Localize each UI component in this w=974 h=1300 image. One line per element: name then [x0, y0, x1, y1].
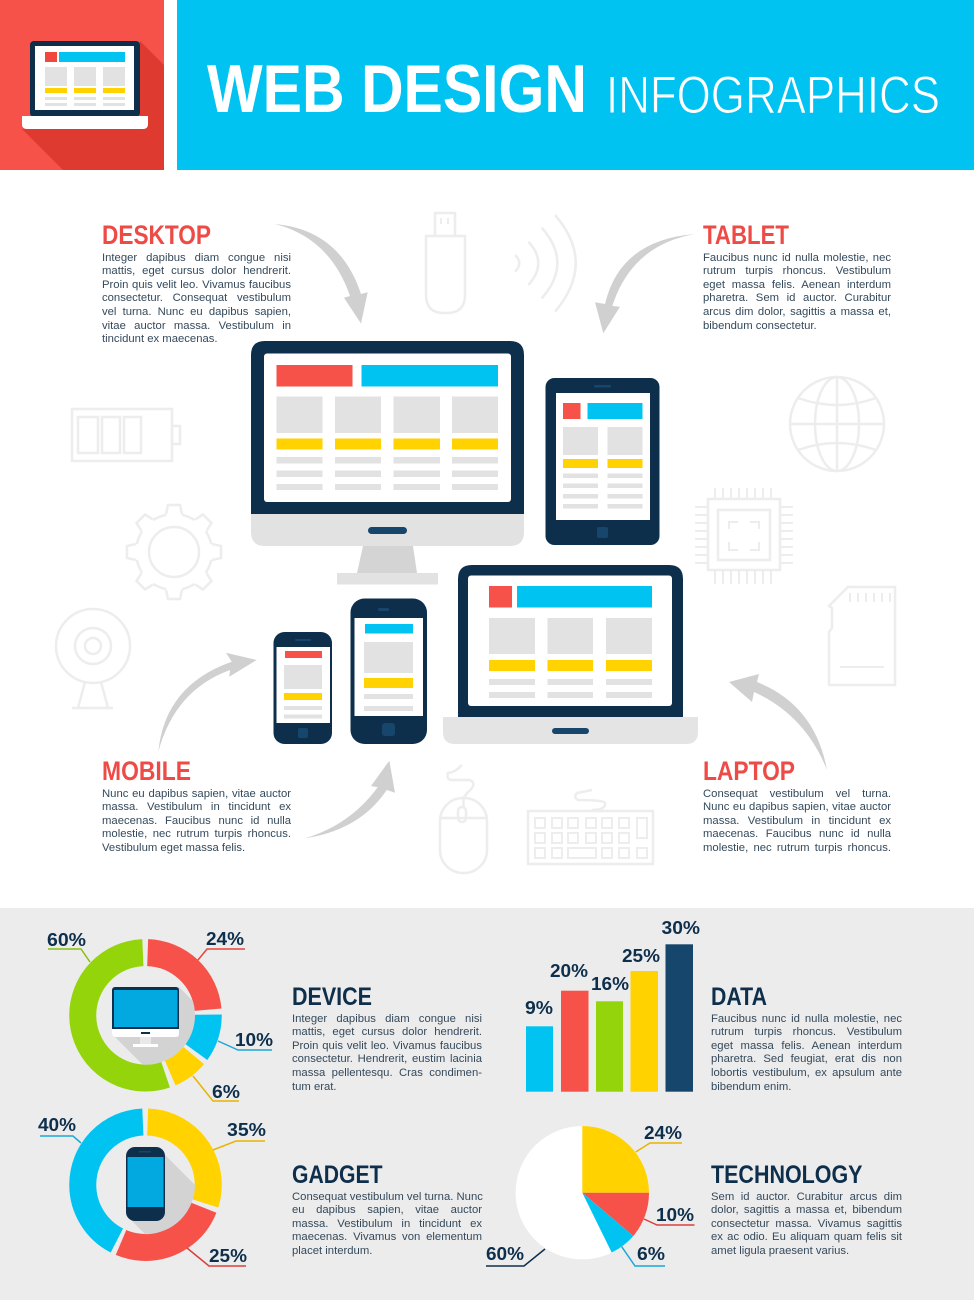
- labels: technology percentages: 6%: [637, 1244, 665, 1264]
- body text: tablet: [703, 252, 891, 332]
- body text: mobile: Vestibulum eget massa felis.: [102, 842, 245, 854]
- body text: technology: ex ac odio. Eu aliquam quam felis sit: [711, 1231, 902, 1243]
- body text: desktop: vitae auctor massa. Vestibulum in: [102, 320, 291, 332]
- icon: laptop: [22, 41, 148, 129]
- text block: technology: [711, 1161, 902, 1257]
- device: tablet: [546, 378, 660, 545]
- body text: gadget: massa. Vestibulum in tincidunt ex: [292, 1218, 482, 1230]
- text block: mobile: [102, 756, 292, 854]
- arrow: laptop: [729, 674, 827, 770]
- device: desktop monitor: [251, 341, 524, 584]
- text block: data: [711, 983, 902, 1093]
- body text: device: mattis, eget cursus dolor hendrerit.: [292, 1026, 482, 1038]
- arrow: mobile to large phone: [305, 761, 395, 838]
- body text: technology: dolor, sagittis a massa et, bibendum: [711, 1204, 902, 1216]
- body text: data: eget massa felis. Aenean interdum: [711, 1040, 902, 1052]
- body text: gadget: maecenas. Vivamus von elementum: [292, 1231, 482, 1243]
- body text: tablet: rutrum turpis rhoncus. Vestibulum: [703, 265, 891, 277]
- body text: data: rutrum turpis rhoncus. Vestibulum: [711, 1026, 902, 1038]
- labels: technology percentages: 10%: [656, 1205, 694, 1225]
- title: [207, 51, 940, 127]
- body text: data: pharetra. Sed feugiat, erat dis non: [711, 1053, 902, 1065]
- body text: tablet: bibendum consectetur.: [703, 320, 817, 332]
- chart: data bars: 16%: [591, 974, 629, 994]
- body text: tablet: arcus dim dolor, sagittis a massa et,: [703, 306, 891, 318]
- icon: usb stick: [426, 213, 465, 313]
- body text: device: consectetur. Hendrerit, eustim lacinia: [292, 1053, 482, 1065]
- body text: mobile: maecenas. Faucibus nunc id nulla: [102, 815, 291, 827]
- body text: gadget: [292, 1190, 483, 1257]
- body text: desktop: Proin quis velit leo. Vivamus faucibus: [102, 279, 291, 291]
- labels: device percentages: [47, 929, 273, 1102]
- labels: technology percentages: [486, 1123, 694, 1266]
- body text: desktop: [102, 252, 291, 345]
- chart: data bars: 25%: [622, 946, 660, 966]
- heading: device: DEVICE: [292, 983, 372, 1011]
- body text: technology: [711, 1190, 902, 1257]
- body text: desktop: vel turna. Nunc eu dapibus sapien,: [102, 306, 291, 318]
- arrow: tablet: [595, 234, 695, 333]
- labels: device percentages: 10%: [235, 1030, 273, 1050]
- body text: device: Proin quis velit leo. Vivamus faucibus: [292, 1040, 482, 1052]
- body text: mobile: Nunc eu dapibus sapien, vitae auctor: [102, 788, 291, 800]
- body text: device: [292, 1012, 482, 1093]
- heading: technology: TECHNOLOGY: [711, 1161, 863, 1189]
- body text: technology: consectetur massa. Vivamus sagittis: [711, 1218, 902, 1230]
- labels: gadget percentages: [38, 1115, 266, 1266]
- labels: device percentages: 6%: [212, 1082, 240, 1102]
- icon: battery: [72, 409, 180, 461]
- title: WEB DESIGN: [207, 51, 587, 127]
- body text: desktop: Integer dapibus diam congue nisi: [102, 252, 291, 264]
- labels: device percentages: 24%: [206, 929, 244, 949]
- body text: tablet: Faucibus nunc id nulla molestie, nec: [703, 252, 891, 264]
- chart: gadget donut: [38, 1115, 266, 1270]
- body text: device: tum erat.: [292, 1081, 337, 1093]
- icon: webcam: [56, 609, 130, 708]
- device: laptop: [443, 565, 698, 744]
- body text: gadget: eu dapibus sapien, vitae auctor: [292, 1204, 482, 1216]
- body text: technology: Sem id auctor. Curabitur arcus dim: [711, 1190, 902, 1202]
- text block: device: [292, 983, 482, 1093]
- background icons: [56, 213, 895, 873]
- icon: gear: [127, 505, 221, 599]
- labels: gadget percentages: 35%: [227, 1120, 266, 1140]
- chart: data bars: 9%: [525, 998, 553, 1018]
- body text: device: massa pellentesqu. Cras condimen-: [292, 1067, 482, 1079]
- body text: desktop: mattis, eget cursus dolor hendrerit.: [102, 265, 291, 277]
- body text: mobile: [102, 788, 292, 854]
- labels: technology percentages: 60%: [486, 1244, 524, 1264]
- body text: desktop: consectetur. Consequat vestibulum: [102, 292, 291, 304]
- chart: technology pie: [486, 1123, 694, 1266]
- heading: data: DATA: [711, 983, 767, 1011]
- labels: device percentages: 60%: [47, 930, 86, 950]
- text block: desktop: [102, 220, 291, 345]
- icon: computer mouse: [440, 765, 487, 873]
- heading: gadget: GADGET: [292, 1161, 382, 1189]
- text block: tablet: [703, 220, 891, 332]
- body text: laptop: Consequat vestibulum vel turna.: [703, 788, 891, 800]
- device: large phone: [350, 598, 427, 744]
- body text: data: bibendum enim.: [711, 1081, 791, 1093]
- body text: technology: amet ligula praesent varius.: [711, 1245, 849, 1257]
- heading: desktop: DESKTOP: [102, 220, 211, 250]
- icon: phone with long shadow: [126, 1147, 195, 1234]
- header: red icon panel: [0, 0, 164, 170]
- body text: data: Faucibus nunc id nulla molestie, nec: [711, 1012, 902, 1024]
- chart: data bars: 20%: [550, 961, 588, 981]
- arrow: desktop: [275, 224, 368, 324]
- text block: laptop: [703, 756, 892, 854]
- body text: desktop: tincidunt ex maecenas.: [102, 333, 218, 345]
- labels: technology percentages: 24%: [644, 1123, 682, 1143]
- body text: gadget: placet interdum.: [292, 1245, 372, 1257]
- panel: statistics background: [0, 908, 974, 1300]
- heading: mobile: MOBILE: [102, 756, 191, 786]
- body text: tablet: eget massa felis. Aenean interdum: [703, 279, 891, 291]
- body text: laptop: maecenas. Faucibus nunc id nulla: [703, 828, 891, 840]
- labels: gadget percentages: 25%: [209, 1246, 247, 1266]
- chart: data bars: 30%: [662, 918, 700, 938]
- body text: mobile: molestie, nec rutrum turpis rhoncus.: [102, 828, 291, 840]
- labels: gadget percentages: 40%: [38, 1115, 76, 1135]
- heading: laptop: LAPTOP: [703, 756, 795, 786]
- icon: monitor with long shadow: [112, 987, 195, 1065]
- body text: laptop: Nunc eu dapibus sapien, vitae auctor: [703, 801, 891, 813]
- icon: microchip: [695, 488, 793, 584]
- chart: data bars: [525, 918, 700, 1092]
- body text: laptop: massa. Vestibulum in tincidunt ex: [703, 815, 891, 827]
- heading: tablet: TABLET: [703, 220, 789, 250]
- body text: mobile: massa. Vestibulum in tincidunt ex: [102, 801, 291, 813]
- body text: gadget: Consequat vestibulum vel turna. Nunc: [292, 1190, 483, 1202]
- icon: wireless signal: [515, 215, 576, 312]
- device: small phone: [274, 632, 332, 744]
- icon: memory card: [829, 587, 895, 685]
- body text: tablet: pharetra. Sem id auctor. Curabitur: [703, 292, 891, 304]
- icon: keyboard: [528, 790, 653, 864]
- text block: gadget: [292, 1161, 483, 1257]
- icon: globe: [790, 377, 884, 471]
- chart: device donut: [47, 929, 273, 1102]
- body text: laptop: molestie, nec rutrum turpis rhoncus.: [703, 842, 891, 854]
- body text: laptop: [703, 788, 892, 854]
- arrow: mobile to small phone: [158, 653, 257, 752]
- body text: data: [711, 1012, 902, 1093]
- header: blue title banner: [177, 0, 974, 170]
- body text: data: lobortis vestibulum, ex apsulum ante: [711, 1067, 902, 1079]
- body text: device: Integer dapibus diam congue nisi: [292, 1012, 482, 1024]
